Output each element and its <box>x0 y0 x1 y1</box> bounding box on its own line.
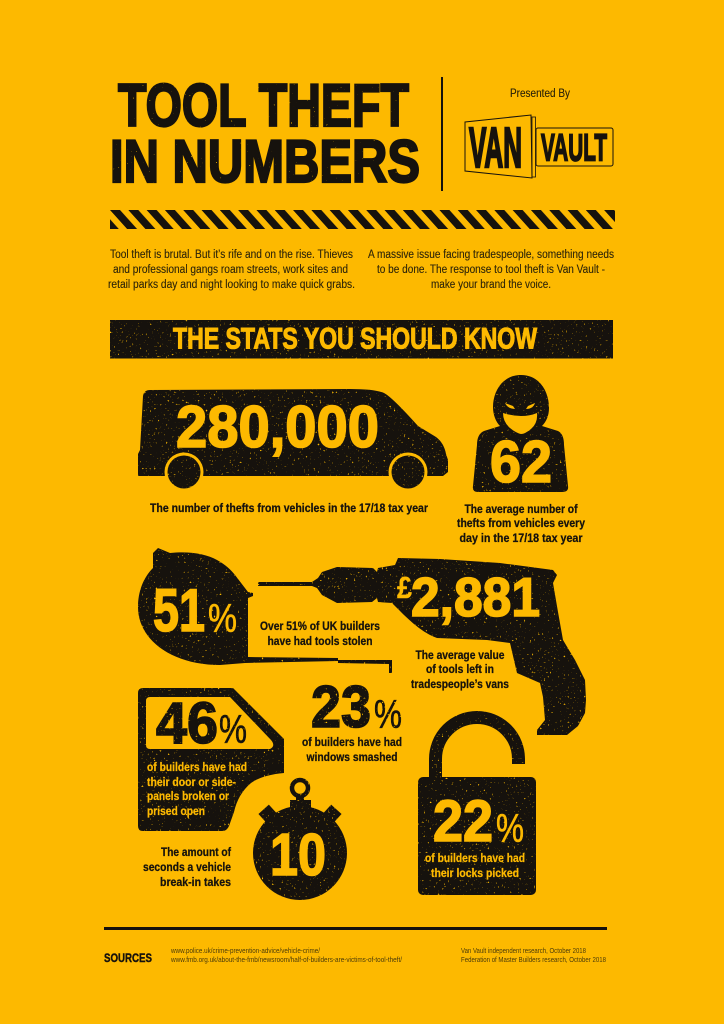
header divider <box>441 77 443 191</box>
source links: www.fmb.org.uk/about-the-fmb/newsroom/half-of-builders-are-victims-of-tool-theft/ <box>170 957 402 964</box>
tape measure stat: 51%: 51 <box>153 577 205 644</box>
logo: Van Vault: VAULT <box>541 128 607 170</box>
van door stat: 46%: prised open <box>147 806 205 818</box>
title: TOOL THEFT <box>118 72 409 139</box>
sources heading: SOURCES <box>104 951 152 965</box>
padlock stat: 22% <box>418 718 536 895</box>
source links <box>170 948 402 964</box>
van stat: 280,000 <box>138 389 448 492</box>
intro text left: and professional gangs roam streets, work sites and <box>113 264 348 276</box>
caption: UK builders tools stolen: Over 51% of UK builders <box>260 621 380 633</box>
padlock stat: 22%: their locks picked <box>431 868 519 880</box>
hooded thief stat: 62 <box>473 375 568 495</box>
intro text right: to be done. The response to tool theft is Van Vault - <box>377 264 605 276</box>
van door stat: 46%: their door or side- <box>147 777 236 789</box>
hazard stripe <box>110 210 615 229</box>
tape measure stat: 51%: % <box>208 597 237 641</box>
caption: thefts from vehicles: The number of thefts from vehicles in the 17/18 tax year <box>150 503 428 515</box>
van door stat: 46%: 46 <box>156 691 218 756</box>
caption: UK builders tools stolen: have had tools stolen <box>268 636 372 648</box>
caption: average thefts per day: thefts from vehicles every <box>457 518 586 530</box>
caption: average thefts per day <box>457 504 586 545</box>
stat: 23%: 23 <box>311 674 371 740</box>
drill stat: £2,881 <box>258 558 586 735</box>
caption: seconds for break-in: The amount of <box>161 847 231 859</box>
research credits: Federation of Master Builders research, October 2018 <box>461 957 606 964</box>
stat: 23%: % <box>374 693 402 737</box>
padlock stat: 22%: % <box>496 807 524 851</box>
padlock stat: 22%: 22 <box>433 789 493 854</box>
intro text right: make your brand the voice. <box>431 279 551 291</box>
stopwatch stat: 10 <box>253 780 347 900</box>
title <box>110 72 420 195</box>
caption: windows smashed: windows smashed <box>306 752 398 764</box>
presented by label: Presented By <box>510 88 570 100</box>
van door stat: 46%: % <box>219 708 247 752</box>
title: IN NUMBERS <box>110 128 420 195</box>
caption: seconds for break-in: seconds a vehicle <box>143 862 231 874</box>
caption: seconds for break-in <box>143 847 231 889</box>
research credits <box>461 948 606 964</box>
van door stat: 46% <box>138 688 284 831</box>
source links: www.police.uk/crime-prevention-advice/vehicle-crime/ <box>170 948 320 955</box>
caption: UK builders tools stolen <box>260 621 380 648</box>
caption: average thefts per day: The average number of <box>464 504 578 516</box>
van door stat: 46%: of builders have had <box>147 762 247 774</box>
padlock stat: 22%: of builders have had <box>425 853 525 865</box>
caption: windows smashed <box>302 737 402 764</box>
caption: average value of tools: tradespeople’s vans <box>411 679 509 691</box>
van door stat: 46%: panels broken or <box>147 791 229 803</box>
caption: windows smashed: of builders have had <box>302 737 402 749</box>
hooded thief stat: 62: 62 <box>490 429 552 495</box>
banner: the stats you should know: THE STATS YOU SHOULD KNOW <box>173 322 537 356</box>
intro text left: Tool theft is brutal. But it’s rife and on the rise. Thieves <box>110 249 353 261</box>
van stat: 280,000: 280,000 <box>176 394 379 460</box>
drill stat: £2,881: £ <box>397 570 412 605</box>
caption: average value of tools: of tools left in <box>426 664 494 676</box>
intro text left: retail parks day and night looking to make quick grabs. <box>108 279 355 291</box>
research credits: Van Vault independent research, October 2018 <box>461 948 586 955</box>
intro text right <box>368 249 614 291</box>
intro text right: A massive issue facing tradespeople, something needs <box>368 249 614 261</box>
logo: Van Vault: VAN <box>469 116 522 180</box>
stopwatch stat: 10: 10 <box>270 822 326 888</box>
tape measure stat: 51% <box>138 548 392 673</box>
footer rule <box>104 927 607 930</box>
caption: seconds for break-in: break-in takes <box>160 877 231 889</box>
caption: average value of tools <box>411 650 509 691</box>
drill stat: £2,881: 2,881 <box>411 566 540 628</box>
caption: average thefts per day: day in the 17/18 tax year <box>460 533 583 545</box>
intro text left <box>108 249 355 291</box>
caption: average value of tools: The average value <box>416 650 504 662</box>
